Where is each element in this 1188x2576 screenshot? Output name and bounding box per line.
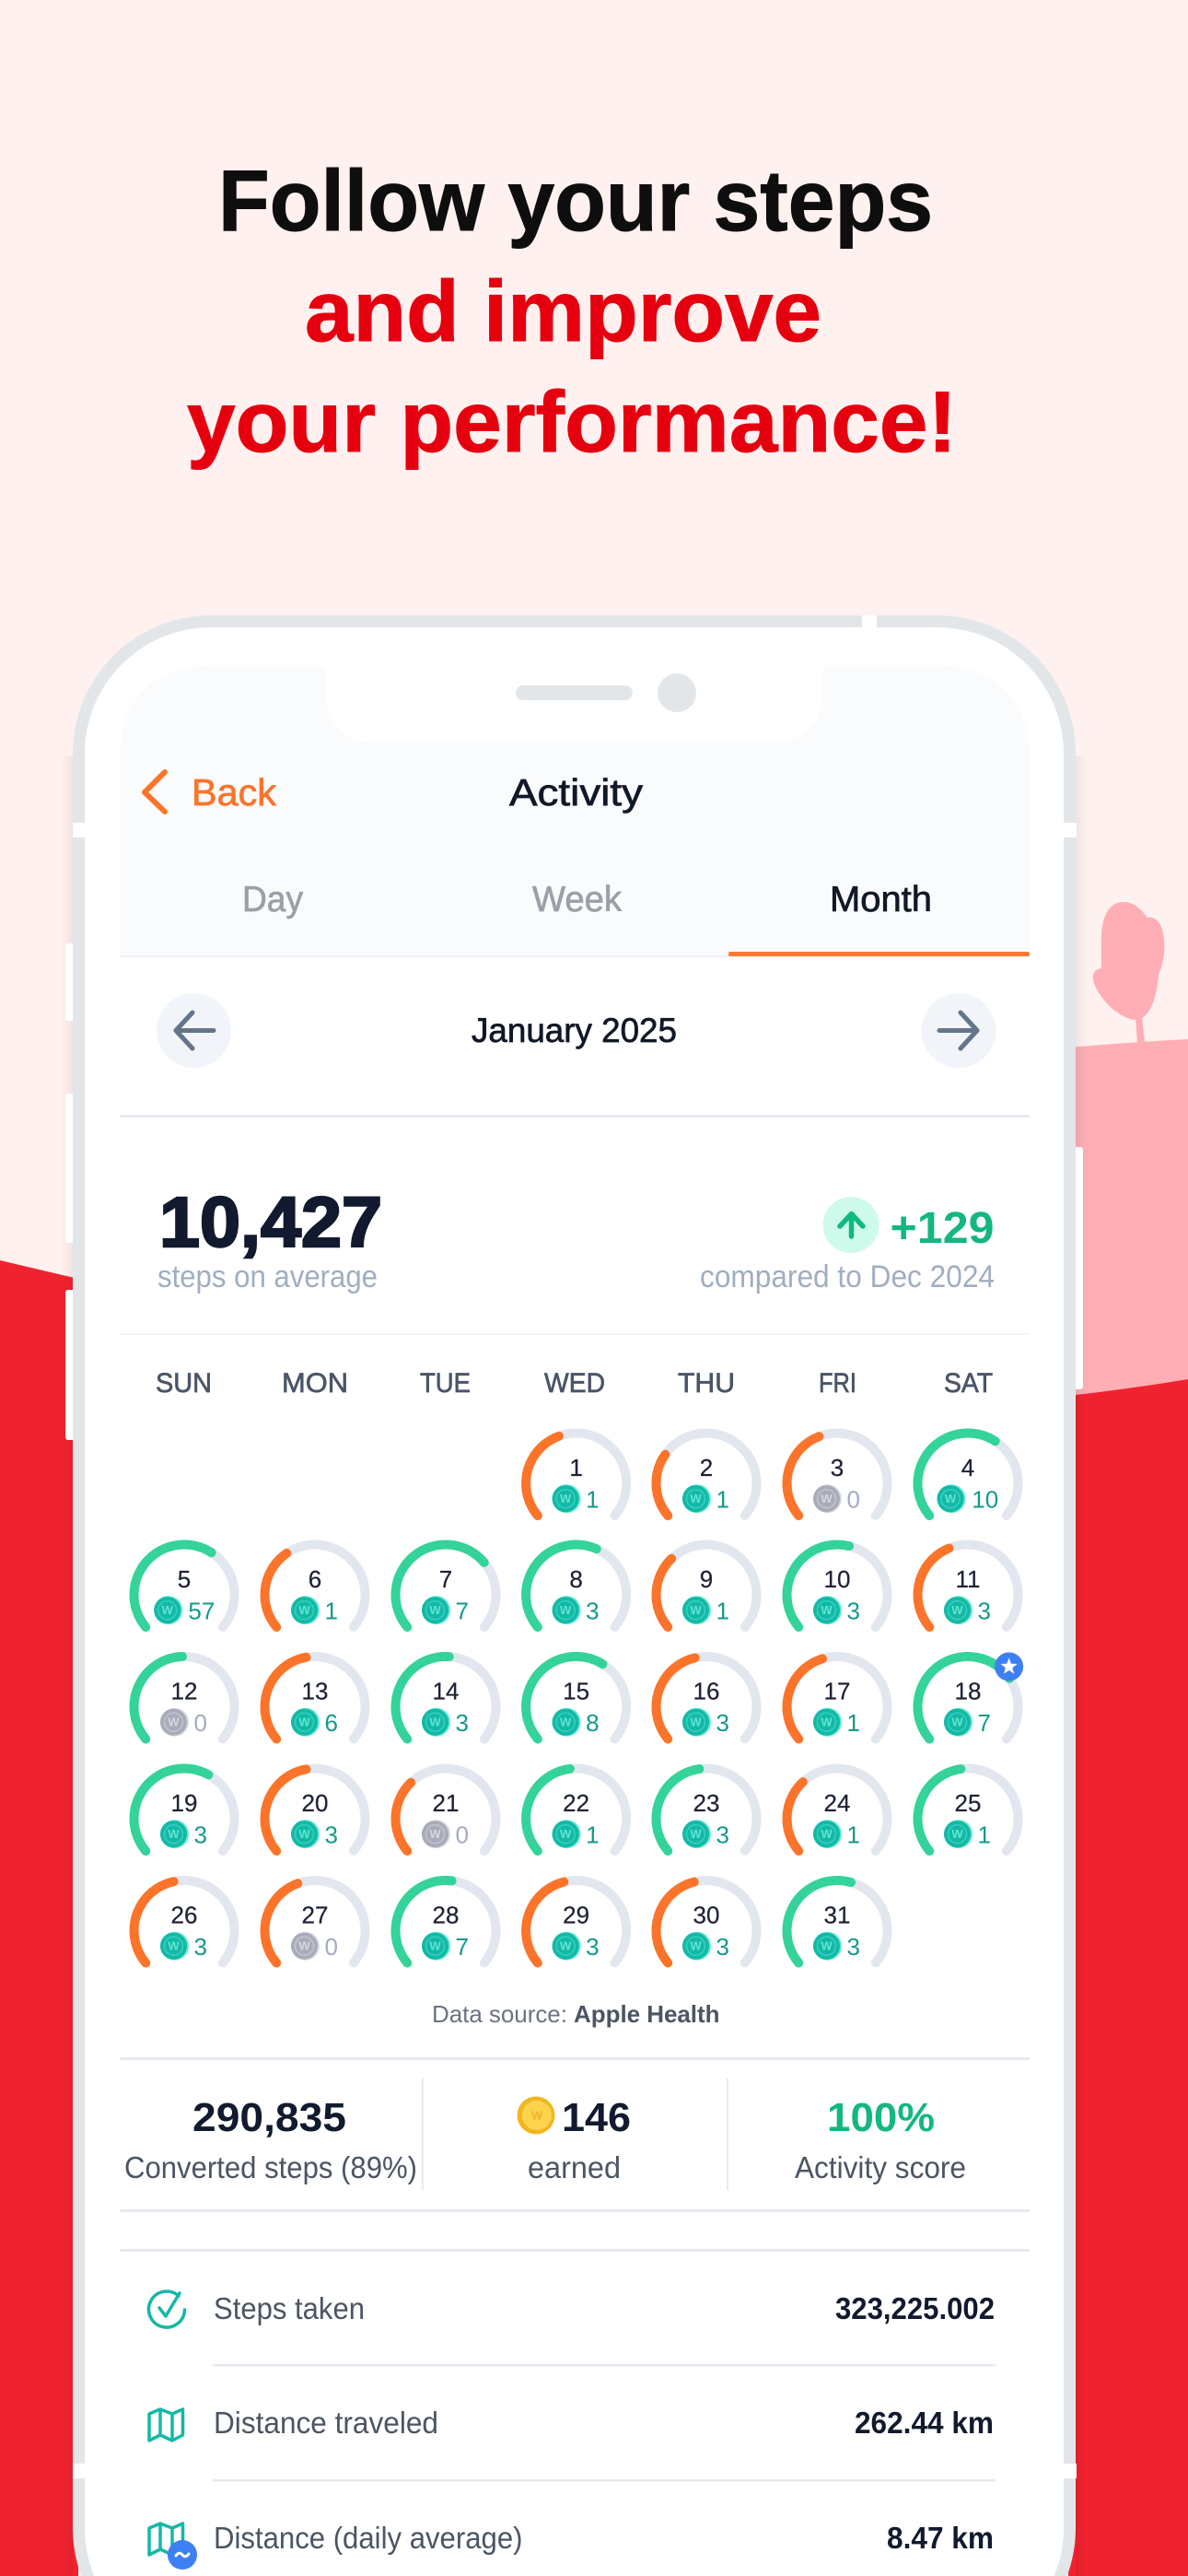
calendar grid [113, 1412, 1039, 2001]
average steps: 10,427 [159, 1183, 382, 1262]
day 27 [244, 1860, 386, 2001]
day 9: W [690, 1603, 702, 1617]
day 5 [113, 1524, 255, 1666]
day 8: W [560, 1603, 572, 1617]
day 4: 10 [972, 1486, 998, 1514]
day 13 [244, 1636, 386, 1777]
day 8: 3 [586, 1598, 600, 1625]
tabs: Week [532, 880, 622, 919]
day 4: W [945, 1492, 957, 1505]
day 2: W [690, 1492, 702, 1505]
comparison: +129 [890, 1204, 995, 1253]
hill: pink right [1068, 1039, 1188, 1400]
day 19: 3 [193, 1821, 207, 1849]
day 18 with star badge: 7 [978, 1709, 991, 1737]
day 29 [506, 1860, 646, 2001]
day 18 with star badge: 18 [955, 1677, 981, 1704]
app header panel [120, 665, 1030, 956]
day 9 [635, 1524, 777, 1666]
day 7: 7 [439, 1565, 452, 1593]
stat: activity score: Activity score [795, 2150, 966, 2184]
weekday headers [156, 1368, 993, 1399]
day 19: 19 [171, 1789, 197, 1817]
day 6: W [298, 1603, 310, 1617]
day 28: W [429, 1939, 441, 1953]
day 13: W [298, 1715, 310, 1729]
row: distance traveled: 262.44 km [855, 2406, 994, 2440]
day 1: 1 [586, 1486, 600, 1514]
day 16: 3 [716, 1709, 729, 1737]
day 8: 8 [569, 1565, 583, 1593]
day 29: 29 [563, 1902, 589, 1929]
comparison: compared to Dec 2024 [700, 1259, 995, 1294]
day 19: W [168, 1827, 180, 1841]
stat: converted steps [124, 2095, 417, 2184]
day 14 [375, 1636, 517, 1777]
day 12: 0 [193, 1709, 207, 1737]
day 2 [635, 1412, 777, 1554]
day 21: W [429, 1827, 441, 1841]
day 25 [897, 1748, 1039, 1890]
day 29: W [560, 1939, 572, 1953]
row: distance daily average: Distance (daily average) [214, 2521, 523, 2555]
stat: coins earned: W [531, 2108, 543, 2123]
comparison [700, 1197, 995, 1294]
weekday headers: FRI [819, 1368, 856, 1399]
day 31: 3 [847, 1933, 860, 1961]
title: and improve [305, 263, 821, 359]
weekday headers: THU [678, 1368, 735, 1399]
day 15: 15 [563, 1677, 589, 1704]
row: distance traveled [149, 2406, 994, 2441]
day 2: 2 [700, 1454, 713, 1481]
icon: map [149, 2409, 182, 2441]
day 12 [113, 1636, 255, 1777]
day 6: 6 [309, 1565, 321, 1593]
day 7: 7 [455, 1598, 469, 1625]
day 2: 1 [716, 1486, 729, 1514]
stat: activity score: 100% [827, 2095, 935, 2140]
day 20: 20 [302, 1789, 328, 1817]
weekday headers: SUN [156, 1368, 212, 1399]
day 27: 0 [324, 1933, 338, 1961]
day 13: 6 [324, 1709, 338, 1737]
day 10 [766, 1524, 908, 1666]
day 1: W [560, 1492, 572, 1505]
day 24: W [821, 1827, 833, 1841]
day 11: W [951, 1603, 963, 1617]
day 22: W [560, 1827, 572, 1841]
day 23 [635, 1748, 777, 1890]
day 6 [244, 1524, 386, 1666]
data source: Data source: Apple Health [432, 2000, 720, 2028]
average steps: steps on average [157, 1259, 378, 1294]
day 10: 3 [847, 1598, 860, 1625]
day 17 [766, 1636, 908, 1777]
phone body [85, 627, 1064, 2576]
active tab underline [728, 952, 1030, 956]
day 12: W [168, 1715, 180, 1729]
day 26: W [168, 1939, 180, 1953]
day 24 [766, 1748, 908, 1890]
stat: coins earned: 146 [562, 2095, 631, 2140]
day 4 [897, 1412, 1039, 1554]
stat: coins earned: earned [528, 2150, 621, 2184]
screen title: Activity [509, 771, 644, 814]
icon: map with average badge [149, 2523, 197, 2570]
day 30: W [690, 1939, 702, 1953]
weekday headers: SAT [944, 1368, 993, 1399]
day 16 [635, 1636, 777, 1777]
day 28 [375, 1860, 517, 2001]
day 5: W [162, 1603, 174, 1617]
day 31: 31 [824, 1902, 850, 1929]
day 17: 1 [847, 1709, 860, 1737]
day 19 [113, 1748, 255, 1890]
day 12: 12 [171, 1677, 197, 1704]
day 30 [635, 1860, 777, 2001]
day 21 [375, 1748, 517, 1890]
day 3: 3 [831, 1454, 844, 1481]
day 24: 24 [824, 1789, 850, 1817]
row: distance daily average: 8.47 km [887, 2521, 994, 2555]
back button [145, 771, 276, 814]
day 31 [766, 1860, 908, 2001]
day 20 [244, 1748, 386, 1890]
day 3: 0 [847, 1486, 860, 1514]
day 21: 21 [433, 1789, 459, 1817]
day 18 with star badge [897, 1636, 1039, 1777]
day 22 [506, 1748, 646, 1890]
camera [658, 673, 696, 712]
day 31: W [821, 1939, 833, 1953]
day 11: 3 [978, 1598, 991, 1625]
day 17: W [821, 1715, 833, 1729]
day 30: 30 [693, 1902, 719, 1929]
day 8 [506, 1524, 646, 1666]
row: steps taken: 323,225.002 [835, 2291, 995, 2325]
day 1 [506, 1412, 646, 1554]
weekday headers: WED [544, 1368, 605, 1399]
tabs: Month [830, 880, 932, 919]
day 14: W [429, 1715, 441, 1729]
day 4: 4 [961, 1454, 974, 1481]
day 30: 3 [716, 1933, 729, 1961]
weekday headers: TUE [420, 1368, 471, 1399]
tabs: Day [242, 880, 303, 919]
title: Follow your steps [218, 152, 933, 249]
day 1: 1 [569, 1454, 583, 1481]
row: distance traveled: Distance traveled [214, 2406, 438, 2440]
hill: red right [1068, 1379, 1188, 2576]
day 10: 10 [824, 1565, 850, 1593]
day 7: W [429, 1603, 441, 1617]
hill: red left [0, 1260, 78, 2576]
day 26 [113, 1860, 255, 2001]
title [187, 152, 957, 470]
day 14: 3 [455, 1709, 469, 1737]
day 16: 16 [693, 1677, 719, 1704]
day 7 [375, 1524, 517, 1666]
day 15: W [560, 1715, 572, 1729]
antenna bands [73, 615, 1077, 2478]
day 25: 25 [955, 1789, 981, 1817]
tree illustration [1093, 902, 1164, 1044]
day 23: 23 [693, 1789, 719, 1817]
previous month button [157, 993, 231, 1068]
phone shadow [61, 755, 1088, 2576]
day 20: W [298, 1827, 310, 1841]
day 15: 8 [586, 1709, 600, 1737]
stat: coins earned [518, 2095, 631, 2184]
day 26: 3 [193, 1933, 207, 1961]
next month button [921, 993, 996, 1068]
day 16: W [690, 1715, 702, 1729]
day 3 [766, 1412, 908, 1554]
row: distance daily average [149, 2521, 994, 2570]
day 14: 14 [433, 1677, 459, 1704]
average steps [157, 1183, 382, 1294]
day 5: 5 [178, 1565, 191, 1593]
day 5: 57 [188, 1598, 215, 1625]
side buttons [65, 943, 1083, 1440]
day 6: 1 [324, 1598, 338, 1625]
day 11: 11 [956, 1565, 980, 1593]
day 20: 3 [324, 1821, 338, 1849]
day 28: 7 [455, 1933, 469, 1961]
row: steps taken [149, 2291, 995, 2327]
day 23: W [690, 1827, 702, 1841]
phone frame [73, 615, 1076, 2576]
weekday headers: MON [282, 1368, 348, 1399]
day 13: 13 [302, 1677, 328, 1704]
stat: activity score [795, 2095, 966, 2184]
day 26: 26 [171, 1902, 197, 1929]
day 28: 28 [433, 1902, 459, 1929]
icon: check circle [149, 2291, 184, 2327]
stats row [124, 2078, 966, 2190]
day 25: W [951, 1827, 963, 1841]
day 23: 3 [716, 1821, 729, 1849]
month label: January 2025 [472, 1012, 677, 1049]
day 9: 1 [716, 1598, 729, 1625]
speaker [516, 685, 633, 700]
day 10: W [821, 1603, 833, 1617]
day 21: 0 [455, 1821, 469, 1849]
row: steps taken: Steps taken [214, 2291, 365, 2325]
day 25: 1 [978, 1821, 991, 1849]
day 29: 3 [586, 1933, 600, 1961]
day 22: 1 [586, 1821, 600, 1849]
day 27: W [298, 1939, 310, 1953]
stat: converted steps: 290,835 [192, 2095, 346, 2140]
title: your performance! [187, 373, 957, 470]
back button: Back [192, 771, 276, 814]
day 27: 27 [302, 1902, 328, 1929]
day 24: 1 [847, 1821, 860, 1849]
day 22: 22 [563, 1789, 589, 1817]
day 17: 17 [824, 1677, 850, 1704]
stat: converted steps: Converted steps (89%) [124, 2150, 417, 2184]
day 15 [506, 1636, 646, 1777]
day 3: W [821, 1492, 833, 1505]
day 11 [897, 1524, 1039, 1666]
tabs [242, 880, 932, 919]
day 9: 9 [700, 1565, 713, 1593]
day 18 with star badge: W [951, 1715, 963, 1729]
